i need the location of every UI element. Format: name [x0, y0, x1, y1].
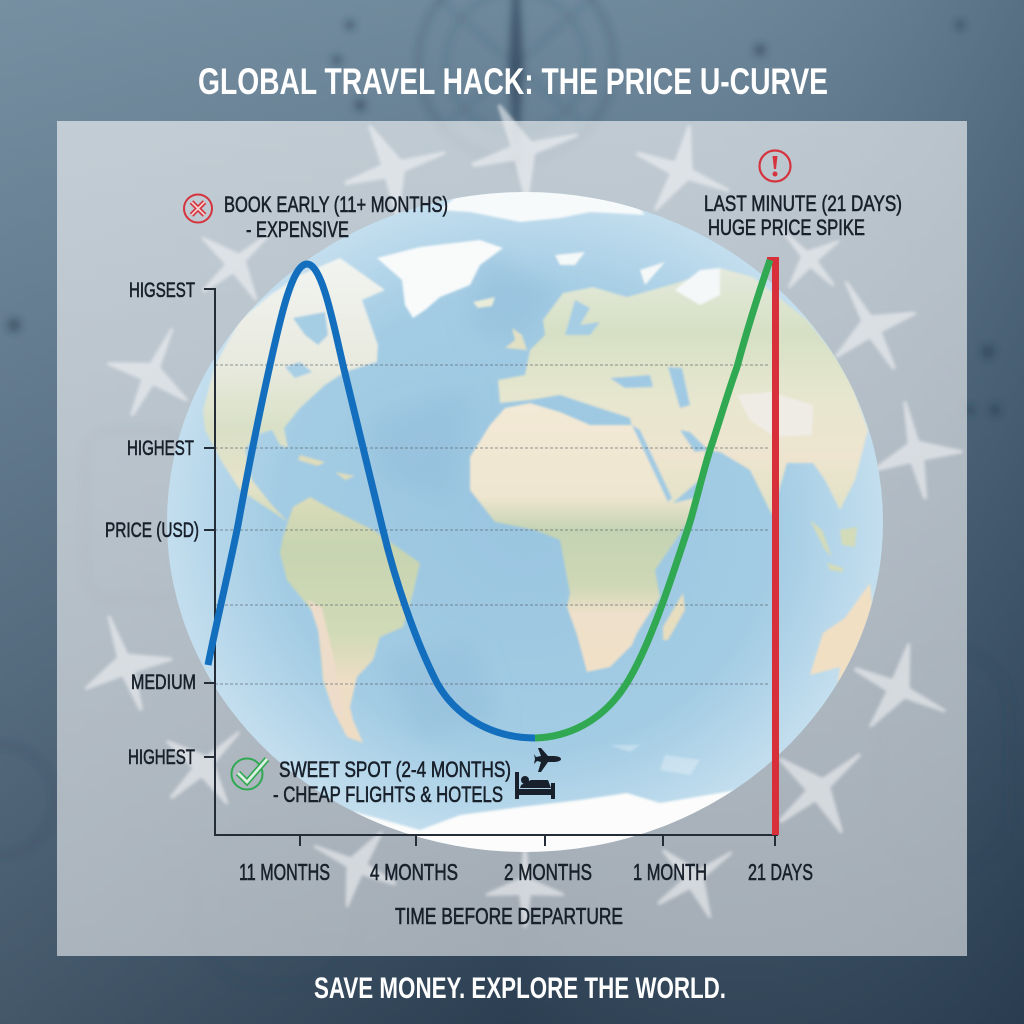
andes	[308, 600, 334, 668]
africa	[470, 403, 700, 672]
red spike line	[767, 257, 779, 835]
greenland	[377, 240, 503, 318]
arctic ice	[555, 252, 720, 305]
x axis title: TIME BEFORE DEPARTURE	[395, 903, 623, 929]
icon: plane	[534, 748, 561, 772]
callout: sweet spot: - CHEAP FLIGHTS & HOTELS	[273, 782, 503, 807]
callout: sweet spot: SWEET SPOT (2-4 MONTHS)	[279, 757, 511, 782]
gridlines	[215, 365, 770, 684]
callout: last minute: LAST MINUTE (21 DAYS)	[704, 191, 902, 216]
callout: last minute	[704, 150, 902, 240]
plane ring	[65, 86, 970, 938]
north polar cap	[441, 192, 645, 223]
icon: red warning	[760, 150, 790, 182]
y axis labels: HIGHEST	[127, 437, 194, 460]
antarctica	[354, 790, 734, 852]
chart	[105, 257, 813, 929]
madagascar	[663, 593, 685, 640]
australia	[810, 583, 873, 687]
x axis labels: 4 MONTHS	[370, 859, 458, 885]
x axis labels: 21 DAYS	[748, 859, 813, 885]
x axis labels	[239, 859, 813, 885]
iceland	[473, 297, 495, 308]
icon: green check	[232, 758, 267, 790]
deep ocean shading	[414, 264, 530, 717]
callout: last minute: HUGE PRICE SPIKE	[708, 215, 865, 240]
x axis labels: 2 MONTHS	[504, 859, 592, 885]
globe	[167, 185, 883, 880]
callout: sweet spot	[232, 748, 561, 807]
callout: book early: - EXPENSIVE	[246, 217, 349, 242]
x axis labels: 11 MONTHS	[239, 859, 330, 885]
y axis labels: PRICE (USD)	[105, 519, 199, 542]
footer tagline: SAVE MONEY. EXPLORE THE WORLD.	[314, 972, 726, 1005]
x axis labels: 1 MONTH	[633, 859, 707, 885]
title: GLOBAL TRAVEL HACK: THE PRICE U-CURVE	[198, 61, 828, 102]
callout: book early	[184, 192, 448, 242]
baltic sea	[565, 300, 600, 335]
y axis labels: MEDIUM	[131, 671, 196, 694]
axes	[204, 289, 778, 846]
callout: book early: BOOK EARLY (11+ MONTHS)	[224, 192, 448, 217]
north america	[203, 258, 385, 522]
y axis labels: HIGSEST	[129, 279, 195, 302]
caribbean islands	[298, 455, 355, 480]
southern clouds	[610, 745, 700, 775]
y axis labels: HIGHEST	[128, 746, 195, 769]
persian gulf	[680, 430, 708, 452]
translucent panel	[57, 121, 967, 956]
eurasia	[498, 268, 868, 515]
red sea	[632, 425, 672, 502]
blue curve	[208, 264, 535, 738]
south america	[280, 497, 420, 743]
indonesia	[810, 520, 857, 572]
hudson bay	[293, 312, 328, 345]
tibet	[737, 392, 813, 437]
black sea	[610, 375, 653, 388]
united kingdom	[505, 328, 527, 350]
icon: bed	[515, 772, 555, 799]
green curve	[535, 260, 770, 738]
great lakes	[285, 362, 312, 378]
icon: red cross	[184, 194, 212, 222]
y axis labels	[105, 279, 199, 769]
caspian sea	[668, 367, 690, 408]
